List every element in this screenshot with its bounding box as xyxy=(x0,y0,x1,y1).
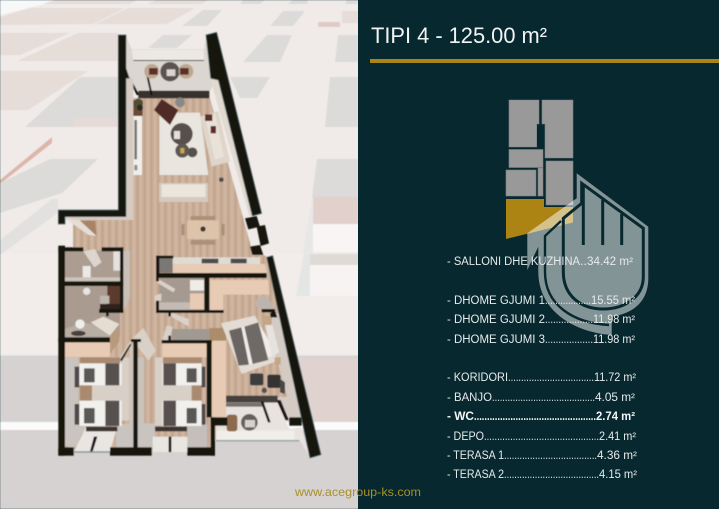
right panel background xyxy=(358,0,719,509)
bathrooms xyxy=(65,249,130,354)
bedroom 1 row: - DHOME GJUMI 1 xyxy=(447,295,545,307)
bedroom 1 row: .................. xyxy=(545,295,591,307)
terrace 1 xyxy=(126,35,215,98)
sofa bottom xyxy=(159,183,208,202)
title: TIPI 4 - 125.00 m² xyxy=(371,23,547,48)
armchair xyxy=(154,97,185,125)
living room rug xyxy=(159,113,208,175)
hallway closets and doors xyxy=(110,295,275,361)
storage row: 2.41 m² xyxy=(599,431,636,443)
selected unit highlight xyxy=(506,199,573,239)
wardrobe peach panels xyxy=(65,280,269,417)
interior wall finishes xyxy=(65,78,258,236)
storage row: - DEPO xyxy=(447,431,484,443)
corridor row: 11.72 m² xyxy=(594,372,636,384)
corridor row: ................................. xyxy=(508,372,594,384)
terrace 2 row: ..................................... xyxy=(504,469,599,481)
upper floor plan: terrace and living room xyxy=(58,32,269,255)
bedroom 3 row: 11.98 m² xyxy=(593,334,635,346)
bathroom row xyxy=(447,392,635,404)
bathroom row: - BANJO xyxy=(447,392,492,404)
coffee tables xyxy=(171,123,197,158)
storage row: ............................................ xyxy=(484,431,599,443)
plant xyxy=(133,99,143,116)
terrace 2 row: 4.15 m² xyxy=(599,469,637,481)
bedroom 3 furnishing xyxy=(138,357,207,447)
bed: bedroom 2 upper xyxy=(75,363,122,387)
bedroom windows xyxy=(74,427,187,452)
dining table xyxy=(181,216,225,245)
terrace 2 row xyxy=(447,469,637,481)
bedroom 2 furnishing xyxy=(65,344,134,449)
bedroom 2 row: .................. xyxy=(545,314,593,326)
watermark logo xyxy=(527,173,648,335)
east wall lower xyxy=(267,256,321,458)
wood floor xyxy=(65,98,290,452)
bedroom closet doors and terrace sides xyxy=(270,311,277,317)
lower floor plan: rooms xyxy=(58,246,321,458)
bed: bedroom 3 lower xyxy=(162,401,205,426)
floor lamp xyxy=(219,177,224,182)
room area list xyxy=(447,256,637,481)
bedroom 1 row: 15.55 m² xyxy=(591,295,635,307)
bedroom 2 row: - DHOME GJUMI 2 xyxy=(447,314,545,326)
depot xyxy=(155,278,205,327)
interior walls xyxy=(58,246,302,456)
east wall xyxy=(206,32,262,216)
gold rule xyxy=(370,59,719,63)
terrace 2 xyxy=(216,396,308,454)
master bedroom xyxy=(221,313,302,417)
WC row: ............................................... xyxy=(474,411,596,423)
background: building facade photo xyxy=(0,0,359,509)
window frames xyxy=(245,216,269,255)
website url: www.acegroup-ks.com xyxy=(294,485,421,499)
terrace 1 row: 4.36 m² xyxy=(597,450,637,462)
bed: bedroom 3 upper xyxy=(162,363,205,387)
terrace 1 row: - TERASA 1 xyxy=(447,450,504,462)
WC row: - WC xyxy=(447,411,474,423)
bedroom 1 row xyxy=(447,295,635,307)
bedroom 3 row: - DHOME GJUMI 3 xyxy=(447,334,545,346)
corridor row: - KORIDORI xyxy=(447,372,508,384)
bathroom row: ........................................ xyxy=(492,392,595,404)
TV unit xyxy=(133,116,142,175)
terrace 1 row: .................................... xyxy=(504,450,597,462)
corridor row xyxy=(447,372,636,384)
terrace 2 row: - TERASA 2 xyxy=(447,469,504,481)
west wall xyxy=(58,35,129,224)
floor plan xyxy=(58,32,321,458)
bedroom 3 row: .................. xyxy=(545,334,593,346)
bedroom 3 row xyxy=(447,334,635,346)
bedroom 2 row xyxy=(447,314,635,326)
WC row: 2.74 m² xyxy=(596,411,635,423)
living room and kitchen row: .. xyxy=(580,256,587,268)
terrace 1 row xyxy=(447,450,637,462)
living room and kitchen row: 34.42 m² xyxy=(587,256,633,268)
bathroom row: 4.05 m² xyxy=(595,392,635,404)
bed: bedroom 2 lower xyxy=(75,401,122,426)
balcony glass outline xyxy=(74,451,110,453)
living room and kitchen row: - SALLONI DHE KUZHINA xyxy=(447,256,580,268)
bedroom 2 row: 11.98 m² xyxy=(593,314,635,326)
key plan xyxy=(506,100,573,239)
sofa right xyxy=(200,111,230,167)
kitchen xyxy=(158,257,267,273)
